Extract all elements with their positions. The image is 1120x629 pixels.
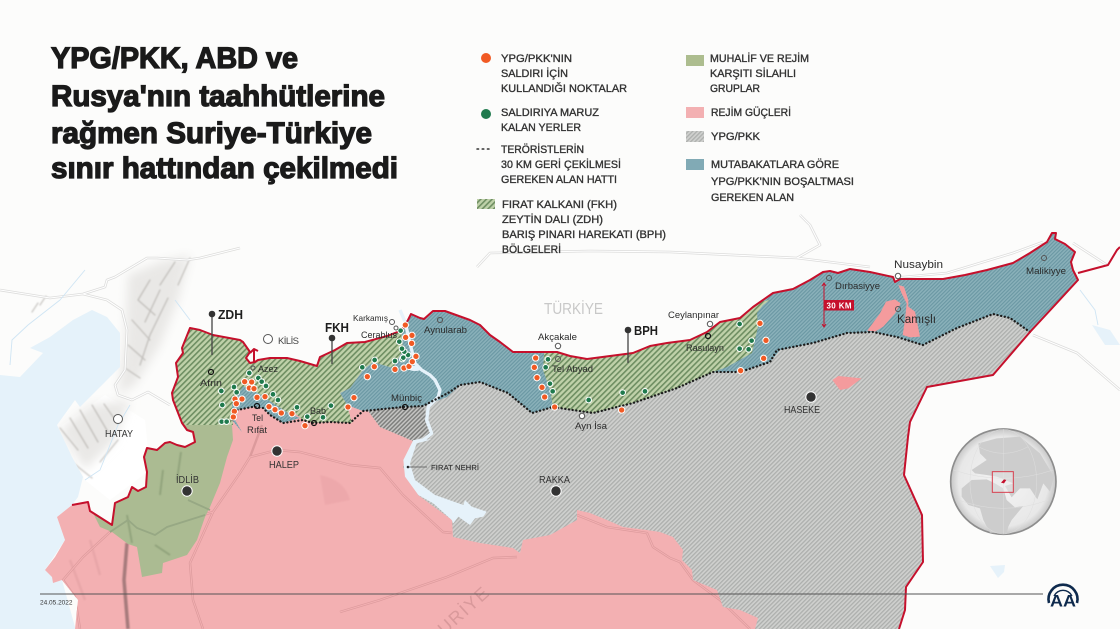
sea	[0, 310, 120, 629]
place names: Rıfat	[247, 425, 267, 436]
legend: zone to be vacated	[686, 159, 854, 204]
green target points west	[218, 328, 411, 424]
title: Rusya'nın taahhütlerine	[51, 80, 385, 113]
river label: Fırat Nehri: FIRAT NEHRİ	[431, 463, 479, 472]
place names: Dırbasiyye	[835, 281, 880, 291]
place names: Ayn İsa	[575, 421, 608, 432]
area: YPG/PKK darker Manbij part	[366, 405, 432, 441]
legend	[477, 52, 854, 256]
legend: zone to be vacated: MUTABAKATLARA GÖRE	[711, 159, 839, 171]
area: regime forces	[45, 368, 758, 629]
place names: KİLİS	[278, 336, 299, 347]
place names: Aynularab	[424, 325, 467, 336]
legend: targeted places	[481, 107, 599, 134]
Euphrates river	[400, 310, 487, 525]
legend: regime forces: REJİM GÜÇLERİ	[711, 106, 791, 119]
bottom rule	[40, 593, 1043, 595]
legend: attack points: SALDIRI İÇİN	[501, 67, 568, 80]
globe land	[962, 437, 1054, 533]
relief on regime area	[70, 540, 130, 629]
legend: attack points	[481, 53, 627, 95]
place names: İDLİB	[176, 473, 199, 486]
area: zone to be vacated	[340, 220, 1090, 413]
area: BPH operation zone	[543, 300, 770, 413]
globe locator square	[992, 472, 1013, 492]
legend: regime forces	[686, 106, 791, 119]
place names: Tel Abyad	[552, 364, 593, 375]
legend: opposition groups: GRUPLAR	[710, 83, 760, 95]
place names: Azez	[258, 364, 278, 375]
place names: Kamışlı	[897, 314, 936, 326]
legend: operation zones	[477, 199, 666, 256]
place names: RAKKA	[539, 475, 570, 486]
legend: operation zones: BARIŞ PINARI HAREKATI (BPH)	[502, 229, 666, 241]
date: 24.05.2022	[40, 600, 73, 606]
place names	[105, 259, 1066, 486]
area: opposition groups (Idlib)	[94, 425, 233, 577]
legend: opposition groups: MUHALİF VE REJİM	[710, 52, 809, 65]
area: Tel Rifat zone	[232, 385, 300, 432]
legend: zone to be vacated: YPG/PKK'NIN BOŞALTMASI	[711, 176, 854, 188]
legend: YPG/PKK: YPG/PKK	[711, 131, 761, 143]
Qamishli regime pockets	[832, 285, 920, 390]
legend: attack points: KULLANDIĞI NOKTALAR	[501, 82, 627, 95]
terrain relief	[32, 255, 1040, 500]
roads on Idlib	[110, 500, 210, 535]
place names: Nusaybin	[894, 259, 943, 271]
title	[51, 42, 398, 185]
legend: attack points: YPG/PKK'NIN	[501, 53, 572, 65]
title: sınır hattından çekilmedi	[51, 152, 398, 185]
area: FKH and ZDH operation zones	[173, 329, 402, 425]
legend: targeted places: SALDIRIYA MARUZ	[501, 107, 599, 119]
place names: Rasulayn	[686, 343, 724, 354]
legend: withdrawal line: 30 KM GERİ ÇEKİLMESİ	[501, 158, 621, 171]
attack points and targets, east	[531, 320, 769, 413]
place names: Afrin	[200, 378, 222, 389]
green target points east	[543, 321, 754, 403]
place names: Münbiç	[391, 393, 422, 404]
legend: withdrawal line	[477, 143, 621, 186]
map: Syria control areas	[30, 220, 1100, 629]
globe grid	[953, 429, 1053, 534]
operation label: ZDH: ZDH	[218, 308, 243, 322]
roads and rivers outside Syria	[0, 215, 1120, 578]
title: YPG/PKK, ABD ve	[51, 42, 298, 75]
legend: withdrawal line: GEREKEN ALAN HATTI	[501, 174, 617, 186]
place names: Bab	[310, 406, 326, 417]
legend: operation zones: BÖLGELERİ	[502, 243, 561, 256]
attack points and targets, west	[218, 322, 419, 429]
place names: Karkamış	[353, 313, 388, 323]
river label: Fırat Nehri	[407, 463, 479, 472]
place names: Tel	[252, 413, 263, 424]
locator globe	[951, 429, 1056, 534]
major cities	[182, 392, 816, 496]
title: rağmen Suriye-Türkiye	[51, 117, 372, 150]
orange attack points east	[531, 320, 769, 413]
30 km distance marker	[822, 283, 854, 327]
place names: HASEKE	[784, 405, 820, 416]
legend: opposition groups: KARŞITI SİLAHLI	[710, 67, 796, 80]
30 km distance marker: 30 KM	[826, 301, 852, 310]
area: YPG/PKK	[367, 314, 1029, 629]
legend: YPG/PKK	[686, 131, 761, 143]
legend: opposition groups	[686, 52, 809, 95]
operation label: ZDH	[209, 308, 243, 355]
city markers	[114, 256, 1046, 426]
AA logo	[1048, 585, 1077, 610]
legend: targeted places: KALAN YERLER	[501, 122, 581, 134]
orange attack points west	[230, 322, 419, 429]
operation label: FKH: FKH	[325, 321, 349, 335]
place names: HALEP	[269, 460, 299, 471]
Syria border	[72, 233, 1120, 629]
country label: Türkiye: TÜRKİYE	[544, 299, 603, 318]
relief on Idlib	[127, 452, 181, 555]
place names: HATAY	[105, 429, 133, 440]
place names: Ceylanpınar	[668, 310, 719, 320]
legend: zone to be vacated: GEREKEN ALAN	[711, 192, 794, 204]
place names: Malikiyye	[1026, 266, 1066, 276]
place names: Cerablus	[361, 330, 397, 340]
operation label: BPH: BPH	[634, 324, 658, 338]
roads in regime area	[63, 425, 750, 629]
legend: operation zones: FIRAT KALKANI (FKH)	[502, 199, 617, 211]
operation label: FKH	[325, 321, 349, 364]
AA logo: AA	[1050, 592, 1076, 610]
place names: Akçakale	[538, 332, 577, 342]
legend: withdrawal line: TERÖRİSTLERİN	[501, 143, 584, 156]
operation label: BPH	[625, 324, 658, 363]
globe Syria mark	[1001, 479, 1006, 483]
30 km withdrawal line	[233, 314, 1030, 423]
legend: operation zones: ZEYTİN DALI (ZDH)	[502, 213, 603, 226]
